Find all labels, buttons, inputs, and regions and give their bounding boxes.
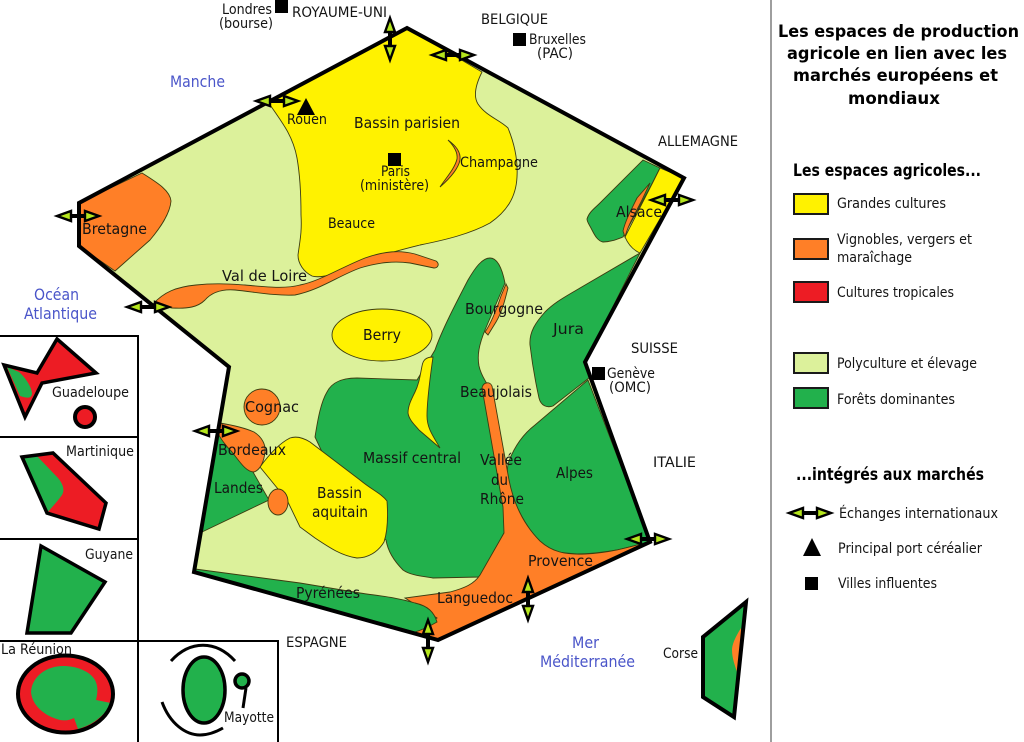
region: Landes: [202, 433, 269, 532]
arrow: Bretagne: [57, 211, 99, 221]
title line 3: marchés européens et: [793, 66, 998, 86]
legend text: grandes cultures: Grandes cultures: [837, 196, 946, 212]
label: Massif central: Massif central: [363, 449, 461, 467]
label: Provence: Provence: [528, 552, 593, 570]
label: Martinique: Martinique: [66, 444, 134, 460]
label: Val de Loire: Val de Loire: [222, 267, 307, 285]
label: Beaujolais: Beaujolais: [460, 383, 532, 401]
Mayotte reef top: [171, 645, 235, 661]
Réunion island: [18, 656, 113, 732]
legend text: port: Principal port céréalier: [838, 541, 982, 557]
region: Bassin aquitain: [260, 437, 388, 558]
inset frames: [0, 336, 278, 742]
arrow: Italie: [627, 534, 669, 544]
label: Paris: Paris: [381, 164, 410, 180]
region: vignoble des Landes: [268, 489, 288, 515]
label: Mer: Mer: [572, 633, 599, 652]
label: aquitain: aquitain: [312, 503, 368, 521]
legend text: forêts: Forêts dominantes: [837, 392, 955, 408]
label: OMC: (OMC): [609, 380, 651, 396]
label: Suisse: SUISSE: [631, 341, 678, 357]
label: Jura: Jura: [552, 320, 584, 338]
legend heading: ...intégrés aux marchés: [796, 465, 984, 485]
region: Berry: [332, 309, 432, 361]
label: Italie: ITALIE: [653, 455, 696, 471]
label: Bruxelles: Bruxelles: [529, 32, 586, 48]
arrow: Bordeaux: [195, 426, 237, 436]
map labels: [24, 2, 738, 671]
Corse vineyard: [732, 628, 741, 672]
region: Bretagne: [79, 173, 171, 271]
label: Belgique: BELGIQUE: [481, 12, 548, 28]
panel: Martinique: [22, 444, 134, 529]
Guadeloupe small island: [75, 407, 95, 427]
label: Allemagne: ALLEMAGNE: [658, 134, 738, 150]
swatch: vignobles: [794, 239, 828, 259]
label: ministère: (ministère): [360, 178, 429, 194]
region: Bassin parisien: [268, 28, 517, 277]
region: Alsace, vignoble: [623, 183, 650, 237]
label: Landes: Landes: [214, 479, 263, 497]
legend text: cultures tropicales: Cultures tropicales: [837, 285, 954, 301]
label: Guadeloupe: Guadeloupe: [52, 385, 129, 401]
region: Alpes: [507, 380, 650, 554]
Martinique forest: [22, 456, 63, 513]
region: Massif central: [315, 258, 505, 578]
label: Bretagne: Bretagne: [82, 220, 147, 238]
icon: Paris square: [388, 153, 401, 166]
Corse: [663, 602, 746, 717]
region: Alsace, grandes cultures: [625, 168, 684, 253]
label: Londres: Londres: [222, 2, 272, 18]
Martinique outline: [22, 453, 106, 529]
label: Bassin: Bassin: [317, 484, 362, 502]
Réunion forest: [31, 666, 111, 729]
region: Bordeaux: [218, 423, 265, 472]
label: Berry: Berry: [363, 326, 401, 344]
label: Mayotte: Mayotte: [224, 710, 274, 726]
overseas inset panels: [0, 336, 278, 742]
Guadeloupe main island: [4, 339, 96, 417]
arrow: Belgique: [432, 50, 474, 60]
swatch: forêts: [794, 388, 828, 408]
arrow: Manche: [256, 96, 298, 106]
label: Méditerranée: Méditerranée: [540, 652, 635, 671]
icon: Rouen port: [297, 98, 315, 115]
legend: intégrés aux marchés: [789, 465, 998, 592]
arrow: Méditerranée: [523, 578, 533, 620]
swatch: cultures tropicales: [794, 282, 828, 302]
Corse fill: [703, 602, 746, 717]
legend heading: Les espaces agricoles...: [793, 161, 981, 181]
title line 2: agricole en lien avec les: [787, 44, 1007, 64]
Guadeloupe outline: [4, 339, 96, 417]
icon: Genève square: [592, 367, 605, 380]
title line 4: mondiaux: [848, 89, 940, 109]
map of metropolitan France: [57, 0, 693, 662]
legend column divider: [770, 0, 772, 742]
label: Rouen: Rouen: [287, 112, 327, 128]
region: Cognac: [244, 389, 280, 425]
label: Beauce: Beauce: [328, 216, 375, 232]
label: La Réunion: La Réunion: [1, 642, 72, 658]
label: Corse: Corse: [663, 646, 698, 662]
region: Massif central, enclave de grandes cultures: [408, 357, 440, 448]
legend text: polyculture: Polyculture et élevage: [837, 356, 977, 372]
legend: espaces agricoles: [793, 161, 981, 408]
label: du: du: [491, 471, 508, 489]
Mayotte connecting line: [243, 688, 246, 708]
label: Genève: Genève: [607, 366, 655, 382]
swatch: grandes cultures: [794, 194, 828, 214]
panel: Guadeloupe: [4, 339, 129, 427]
Corse outline: [703, 602, 746, 717]
border of France: [79, 28, 684, 640]
panel: Guyane: [27, 546, 133, 633]
legend text: échanges: Échanges internationaux: [839, 505, 998, 522]
Mayotte reef bottom: [162, 702, 223, 735]
label: bourse: (bourse): [219, 16, 273, 32]
legend text: villes: Villes influentes: [838, 576, 937, 592]
label: Océan: Océan: [34, 285, 79, 304]
swatch: polyculture: [794, 353, 828, 373]
legend text: maraîchage: maraîchage: [837, 250, 912, 266]
Guadeloupe forest: [7, 367, 32, 398]
region: Jura: [530, 253, 640, 407]
Mayotte small island: [235, 674, 249, 688]
Martinique island: [22, 453, 106, 529]
Guyane shape: [27, 546, 105, 633]
panel: Mayotte: [162, 645, 274, 735]
legend icon: arrow: [789, 508, 831, 518]
label: Espagne: ESPAGNE: [286, 635, 347, 651]
label: Alsace: Alsace: [616, 203, 662, 221]
region: Bourgogne: [485, 284, 508, 335]
label: Languedoc: Languedoc: [437, 589, 513, 607]
arrow: Val de Loire: [127, 302, 169, 312]
arrow: Royaume-Uni: [385, 18, 395, 60]
label: PAC: (PAC): [537, 46, 573, 62]
base region: polyculture et élevage: [79, 28, 684, 640]
label: Rhône: Rhône: [480, 490, 524, 508]
title: [778, 22, 1019, 109]
label: Bassin parisien: Bassin parisien: [354, 114, 460, 132]
Réunion outline: [18, 656, 113, 732]
panel: La Réunion: [1, 642, 113, 732]
region: Val de Loire: [153, 252, 438, 308]
region: Alsace, forêts: [587, 160, 660, 242]
icon: Bruxelles square: [513, 33, 526, 46]
label: Pyrénées: Pyrénées: [296, 584, 360, 602]
region: Champagne: [440, 140, 460, 187]
label: Bourgogne: Bourgogne: [465, 300, 543, 318]
label: Bordeaux: Bordeaux: [218, 441, 286, 459]
label: Cognac: Cognac: [245, 398, 299, 416]
region: Pyrénées: [194, 569, 437, 632]
legend icon: square: [805, 577, 818, 590]
label: Royaume-Uni: ROYAUME-UNI: [292, 5, 387, 21]
legend icon: triangle: [803, 538, 821, 556]
label: Guyane: Guyane: [85, 547, 133, 563]
label: Champagne: Champagne: [460, 155, 538, 171]
arrow: Espagne: [423, 620, 433, 662]
label: Alpes: Alpes: [556, 464, 593, 482]
icon: Londres square: [275, 0, 288, 13]
arrow: Allemagne: [651, 195, 693, 205]
label: Atlantique: Atlantique: [24, 304, 97, 323]
legend text: vignobles: Vignobles, vergers et: [837, 232, 972, 248]
label: Vallée: Vallée: [480, 451, 522, 469]
Mayotte main island: [183, 657, 225, 723]
label: Manche: Manche: [170, 72, 225, 91]
region: Vallée du Rhône, Provence et Languedoc: [405, 383, 652, 640]
